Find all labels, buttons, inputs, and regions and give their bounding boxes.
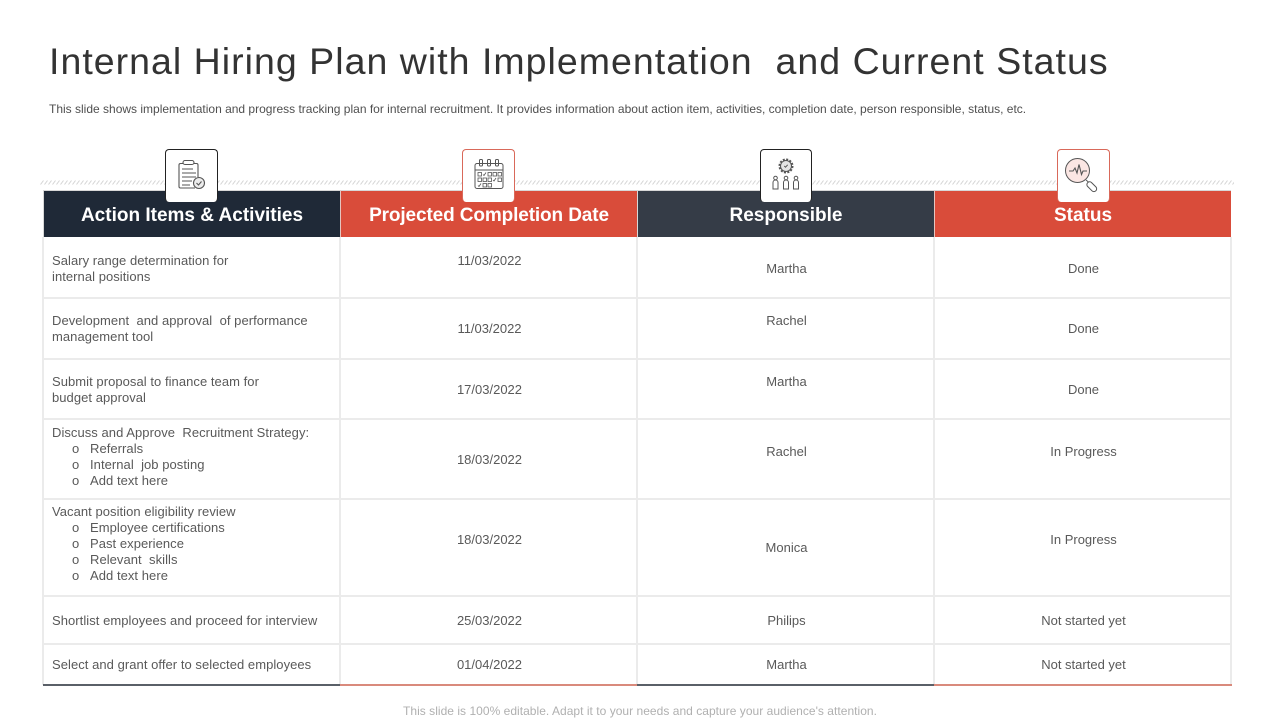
row 3 bbox=[52, 374, 1099, 405]
icon: gear with people bbox=[760, 149, 812, 202]
text: Development and approval of performance management tool bbox=[52, 313, 308, 344]
text: o bbox=[72, 520, 79, 535]
text: In Progress bbox=[1050, 532, 1117, 547]
row 4 bbox=[52, 425, 1117, 488]
text: Shortlist employees and proceed for interview bbox=[52, 613, 317, 628]
text: In Progress bbox=[1050, 444, 1117, 459]
text: 11/03/2022 bbox=[457, 321, 522, 336]
text: Add text here bbox=[90, 568, 168, 583]
text: 18/03/2022 bbox=[457, 532, 522, 547]
text: Relevant skills bbox=[90, 552, 178, 567]
title: Internal Hiring Plan with Implementation and Current Status bbox=[49, 40, 1109, 82]
footer note: This slide is 100% editable. Adapt it to your needs and capture your audience's attention. bbox=[403, 704, 877, 718]
icon: calendar bbox=[462, 149, 515, 202]
text: o bbox=[72, 457, 79, 472]
text: o bbox=[72, 552, 79, 567]
text: Not started yet bbox=[1041, 657, 1126, 672]
header: Projected Completion Date bbox=[340, 190, 637, 237]
row 7 bbox=[52, 657, 1126, 672]
text: Done bbox=[1068, 261, 1099, 276]
text: Select and grant offer to selected employees bbox=[52, 657, 311, 672]
text: Add text here bbox=[90, 473, 168, 488]
text: Monica bbox=[766, 540, 807, 555]
row 5 bbox=[52, 504, 1117, 583]
header: Action Items & Activities bbox=[43, 190, 340, 237]
text: 18/03/2022 bbox=[457, 452, 522, 467]
text: o bbox=[72, 568, 79, 583]
text: Vacant position eligibility review bbox=[52, 504, 236, 519]
text: Internal job posting bbox=[90, 457, 205, 472]
text: 01/04/2022 bbox=[457, 657, 522, 672]
header: Status bbox=[934, 190, 1231, 237]
text: 25/03/2022 bbox=[457, 613, 522, 628]
icon: magnifier with pulse bbox=[1057, 149, 1110, 202]
row 1 bbox=[52, 253, 1099, 284]
text: Philips bbox=[767, 613, 806, 628]
row 2 bbox=[52, 313, 1099, 344]
text: Employee certifications bbox=[90, 520, 225, 535]
header: Responsible: Responsible bbox=[730, 205, 842, 226]
text: 11/03/2022 bbox=[457, 253, 522, 268]
header: Action Items & Activities: Action Items & Activities bbox=[81, 205, 303, 226]
subtitle: This slide shows implementation and progress tracking plan for internal recruitment. It provides information about action item, activities, completion date, person responsible, status, etc. bbox=[49, 102, 1026, 116]
header: Responsible bbox=[637, 190, 934, 237]
row 6 bbox=[52, 613, 1126, 628]
text: Done bbox=[1068, 321, 1099, 336]
text: Rachel bbox=[766, 313, 807, 328]
text: Past experience bbox=[90, 536, 184, 551]
header: Projected Completion Date: Projected Completion Date bbox=[369, 205, 609, 226]
text: 17/03/2022 bbox=[457, 382, 522, 397]
text: o bbox=[72, 441, 79, 456]
text: Rachel bbox=[766, 444, 807, 459]
text: Salary range determination for internal positions bbox=[52, 253, 228, 284]
text: o bbox=[72, 473, 79, 488]
text: Martha bbox=[766, 261, 807, 276]
text: Done bbox=[1068, 382, 1099, 397]
text: o bbox=[72, 536, 79, 551]
text: Not started yet bbox=[1041, 613, 1126, 628]
header: Status: Status bbox=[1054, 205, 1112, 226]
text: Submit proposal to finance team for budget approval bbox=[52, 374, 259, 405]
text: Referrals bbox=[90, 441, 143, 456]
text: Martha bbox=[766, 657, 807, 672]
icon: clipboard checklist bbox=[165, 149, 218, 202]
text: Martha bbox=[766, 374, 807, 389]
text: Discuss and Approve Recruitment Strategy: bbox=[52, 425, 309, 440]
